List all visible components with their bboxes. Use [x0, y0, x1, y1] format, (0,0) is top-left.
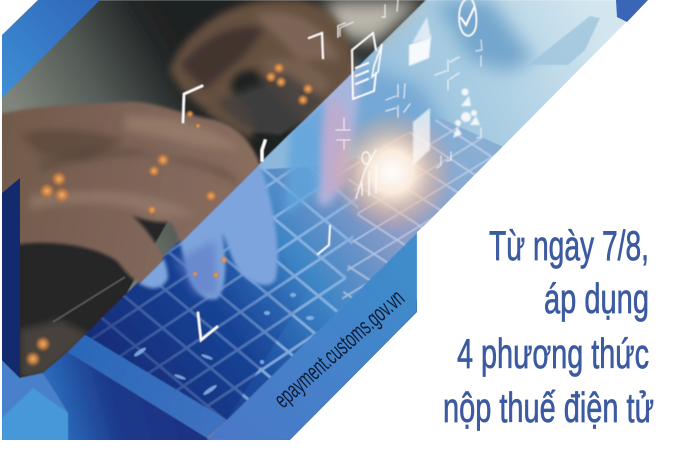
- stripe: navy left column: [2, 178, 20, 378]
- small brackets: [382, 0, 398, 17]
- hands in natural colour: [0, 0, 358, 299]
- hands under blue tint: [138, 68, 362, 302]
- bracket: hand: [183, 86, 202, 122]
- blurred screen shapes: [314, 0, 539, 150]
- lower left bright blue block: [2, 388, 68, 440]
- title line 2: áp dụng: [544, 275, 649, 322]
- light glow: [335, 113, 450, 230]
- icon: stats figure: [356, 150, 376, 198]
- bracket: keyboard right: [318, 226, 330, 254]
- laptop deck, dark: [2, 215, 168, 378]
- grey shape behind the upper hand: [208, 88, 294, 136]
- cross marks: [336, 118, 350, 149]
- stripe: blue diagonal: [2, 0, 100, 98]
- orange dots: [25, 62, 314, 367]
- bracket: keyboard: [198, 313, 217, 340]
- icons and brackets: [183, 0, 482, 340]
- icon: document with pen: [352, 33, 382, 99]
- stripe: white corner: [0, 0, 38, 35]
- photo background: [2, 0, 426, 440]
- screen wedge: [528, 16, 600, 65]
- corner block: top right: [616, 0, 648, 22]
- icon: form sheet: [413, 108, 430, 165]
- hand shading: [20, 12, 340, 218]
- finger tint: [175, 95, 350, 295]
- key legends: [133, 293, 314, 396]
- right blue band: [207, 233, 417, 440]
- laptop edge highlight: [53, 277, 125, 322]
- lower laptop front: [43, 352, 216, 445]
- palm rest band: [68, 335, 227, 438]
- title: [443, 222, 654, 431]
- blue tinted right area: [68, 0, 648, 356]
- bracket: far upper: [338, 23, 345, 37]
- laptop deck warm tint: [20, 320, 90, 378]
- bracket: centre right: [262, 141, 265, 160]
- icon: check badge: [459, 0, 476, 36]
- icon: wallet: [409, 17, 432, 66]
- lower left mid blue block: [2, 360, 68, 418]
- icon: people: [453, 88, 480, 138]
- keyboard keys: [85, 118, 510, 420]
- website address: epayment.customs.gov.vn: [269, 285, 410, 413]
- bracket: upper: [309, 33, 323, 58]
